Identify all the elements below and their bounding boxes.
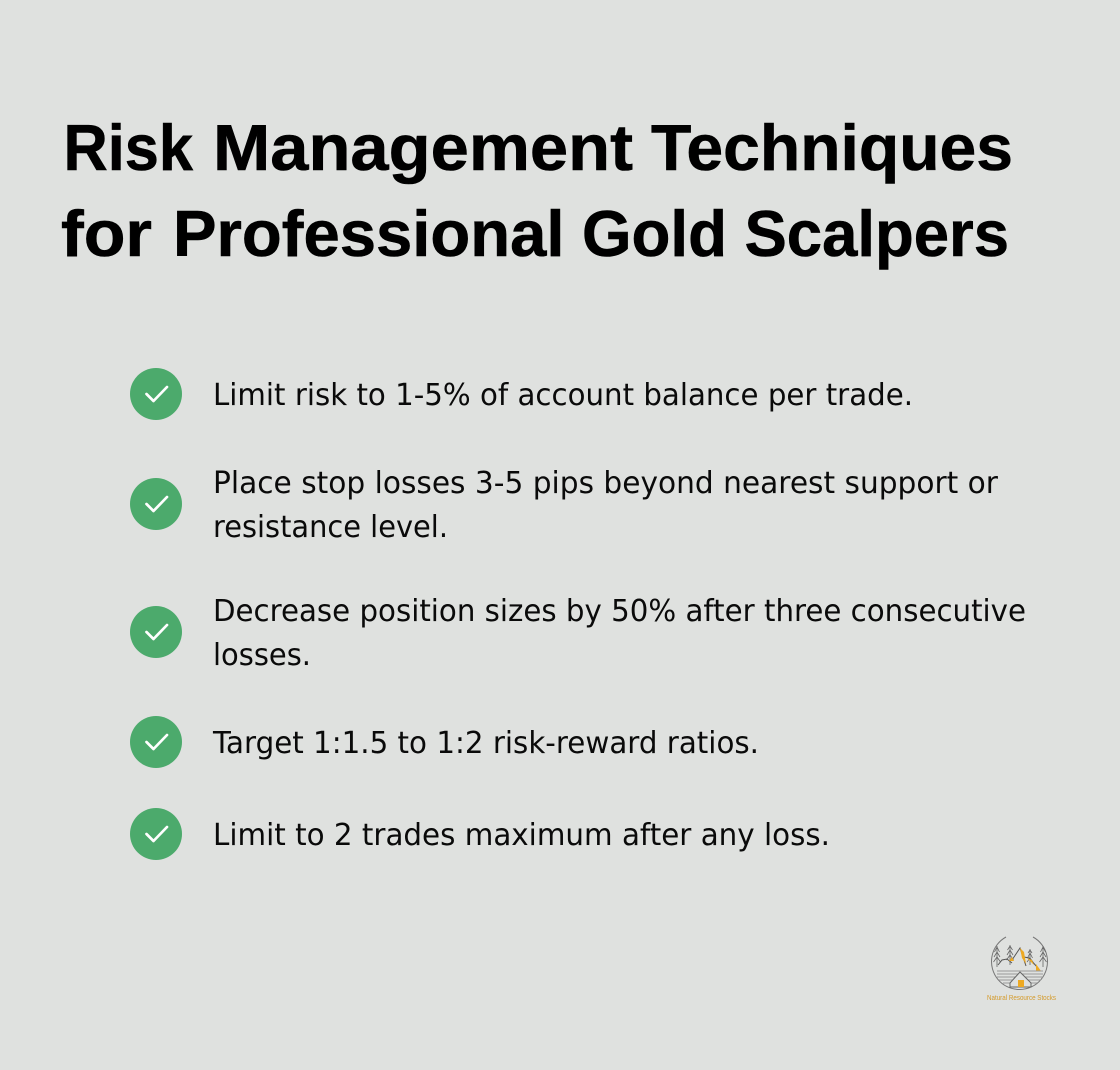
title xyxy=(61,111,1013,270)
logo cabin xyxy=(1010,972,1031,987)
logo mountains xyxy=(998,948,1038,968)
item 5 xyxy=(130,808,830,860)
title: Management xyxy=(213,111,633,184)
logo: Natural Resource Stocks xyxy=(987,937,1056,1002)
item 4: Target 1:1.5 to 1:2 risk-reward ratios. xyxy=(212,726,759,761)
logo water lines xyxy=(997,971,1043,983)
item 5: Limit to 2 trades maximum after any loss. xyxy=(213,818,830,853)
item 2 xyxy=(130,466,998,545)
title: Scalpers xyxy=(744,197,1009,270)
title: Professional xyxy=(173,197,564,270)
item 1 xyxy=(130,368,913,420)
logo trees xyxy=(994,945,1046,967)
title: Techniques xyxy=(651,111,1013,184)
title: Risk xyxy=(64,111,194,184)
checklist xyxy=(130,368,1026,860)
item 3 xyxy=(130,594,1026,673)
logo ring xyxy=(992,937,1048,990)
item 3: losses. xyxy=(213,638,311,673)
item 3: Decrease position sizes by 50% after three consecutive xyxy=(213,594,1026,629)
item 1: Limit risk to 1-5% of account balance per trade. xyxy=(213,378,913,413)
item 2: Place stop losses 3-5 pips beyond nearest support or xyxy=(213,466,998,501)
item 2: resistance level. xyxy=(213,510,448,545)
title: Gold xyxy=(582,197,727,270)
title: for xyxy=(61,197,152,270)
item 4 xyxy=(130,716,759,768)
logo wordmark: Natural Resource Stocks xyxy=(987,995,1056,1002)
